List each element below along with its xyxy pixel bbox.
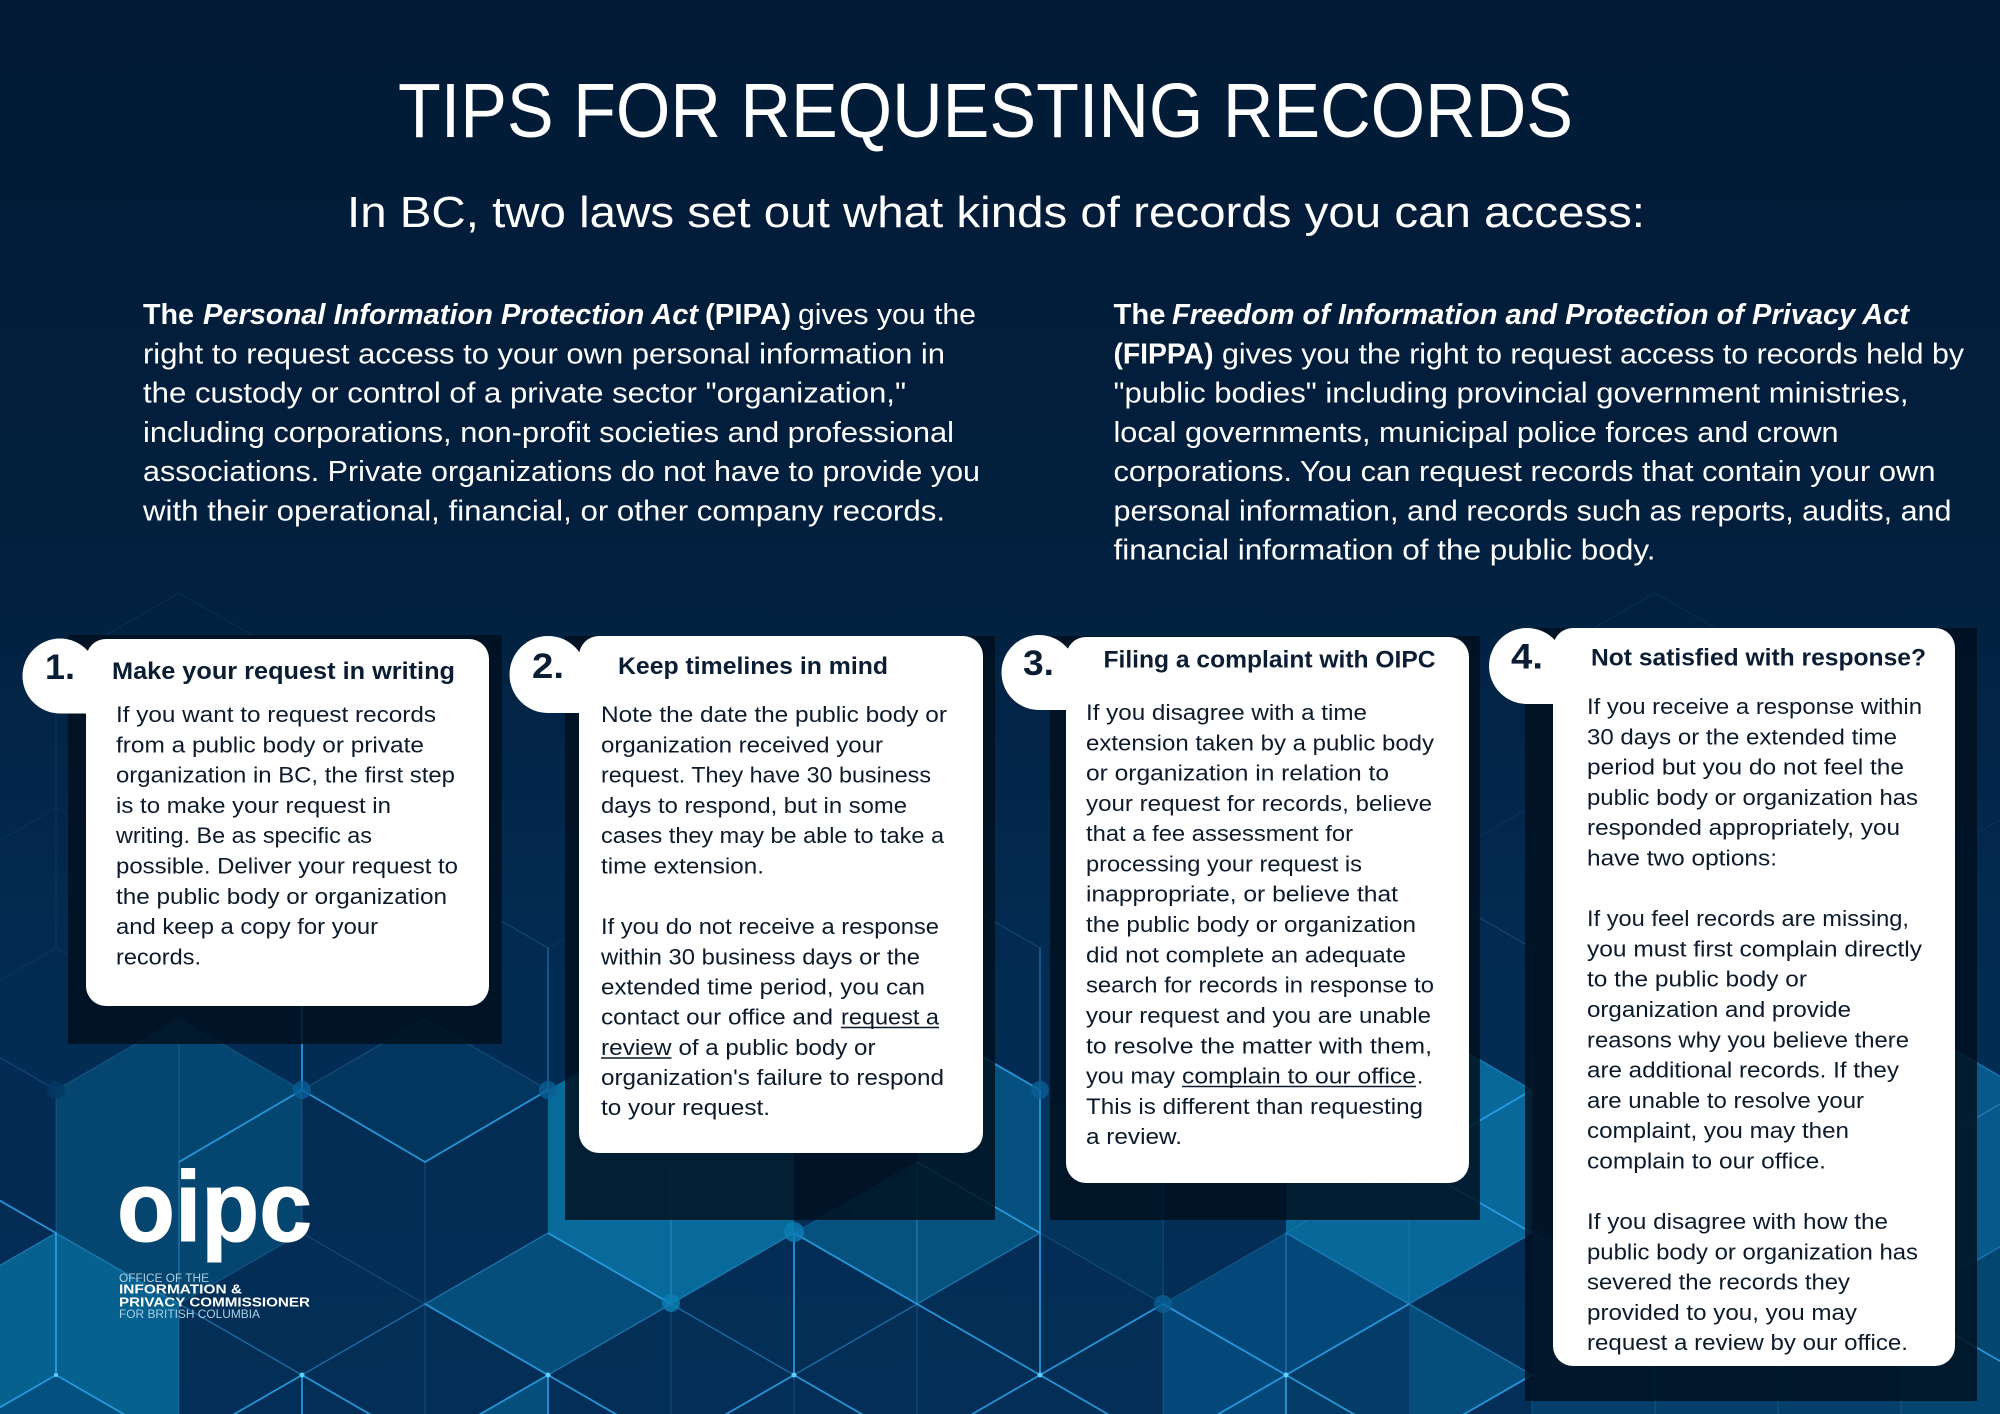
step 1 body text: is to make your request in xyxy=(116,793,391,818)
text block: PIPA: (PIPA) xyxy=(705,299,791,331)
step 2 body text: Note the date the public body or xyxy=(601,702,948,727)
step 4 body text: If you receive a response within xyxy=(1587,694,1922,719)
text block: PIPA: right to request access to your own personal information in xyxy=(143,338,945,370)
step 3 body text: to resolve the matter with them, xyxy=(1086,1033,1432,1058)
step 3 body text: or organization in relation to xyxy=(1086,761,1389,786)
logo: OIPC xyxy=(117,1151,312,1321)
step 4 body text: responded appropriately, you xyxy=(1587,815,1900,840)
step 4 body text: 30 days or the extended time xyxy=(1587,724,1897,749)
text block: PIPA: gives you the xyxy=(798,299,976,331)
step 3 body text: extension taken by a public body xyxy=(1086,730,1435,755)
step 1 number: 1. xyxy=(45,648,75,687)
step 3 body text: that a fee assessment for xyxy=(1086,821,1354,846)
text block: FIPPA xyxy=(1114,299,1965,566)
step 2 body text: days to respond, but in some xyxy=(601,793,907,818)
step 4 body text: are additional records. If they xyxy=(1587,1058,1900,1083)
step 2 body text: extended time period, you can xyxy=(601,974,925,1000)
step 3 body text: the public body or organization xyxy=(1086,912,1416,937)
step 2 body text: contact our office and xyxy=(601,1004,833,1030)
step 1 body text: If you want to request records xyxy=(116,702,436,727)
step 2 body text: If you do not receive a response xyxy=(601,914,939,939)
text block: PIPA: associations. Private organizations do not have to provide you xyxy=(143,456,980,488)
panel: step 3 xyxy=(1002,635,1480,1220)
step 4 body text: have two options: xyxy=(1587,846,1777,870)
panel: step 4 xyxy=(1489,628,1977,1401)
step 4 body text: provided to you, you may xyxy=(1587,1300,1858,1325)
text block: PIPA xyxy=(142,299,980,527)
step 4 body text: to the public body or xyxy=(1587,967,1808,992)
step 2 body text: organization's failure to respond xyxy=(601,1065,944,1090)
text block: FIPPA: (FIPPA) xyxy=(1114,338,1214,370)
step 4 body text: organization and provide xyxy=(1587,997,1851,1022)
step 1 body text: writing. Be as specific as xyxy=(115,823,372,848)
subtitle: In BC, two laws set out what kinds of records you can access: xyxy=(347,188,1645,237)
step 4 body text: reasons why you believe there xyxy=(1587,1027,1909,1052)
text block: PIPA: Personal Information Protection Act xyxy=(203,299,700,331)
text block: PIPA: the custody or control of a private sector "organization," xyxy=(143,378,906,410)
step 3 body text: search for records in response to xyxy=(1086,973,1434,998)
step 3 body text: your request and you are unable xyxy=(1086,1003,1431,1028)
logo: OIPC: OFFICE OF THE xyxy=(119,1273,209,1285)
step 1 body text: records. xyxy=(116,944,201,970)
step 2 body text: review xyxy=(601,1035,672,1060)
step 2 body text: request. They have 30 business xyxy=(601,762,931,788)
logo: OIPC: FOR BRITISH COLUMBIA xyxy=(119,1309,260,1321)
step 2 body text: of a public body or xyxy=(678,1035,876,1060)
step 2 body text: organization received your xyxy=(601,732,884,758)
step 2 number: 2. xyxy=(532,647,564,686)
step 2 body text: within 30 business days or the xyxy=(600,944,920,970)
step 3 body text: processing your request is xyxy=(1086,851,1362,876)
step 3 body text: . xyxy=(1417,1064,1423,1088)
text block: FIPPA: gives you the right to request access to records held by xyxy=(1222,338,1965,370)
step 4 body text: you must first complain directly xyxy=(1587,936,1923,961)
step 3 body text: If you disagree with a time xyxy=(1086,700,1367,725)
text block: PIPA: with their operational, financial, or other company records. xyxy=(142,495,945,527)
step 4 body text: period but you do not feel the xyxy=(1587,755,1904,780)
step 4 body text: complaint, you may then xyxy=(1587,1118,1849,1143)
step 2 body text: time extension. xyxy=(601,854,764,878)
step 2 heading: Keep timelines in mind xyxy=(618,653,888,680)
step 3 body text: This is different than requesting xyxy=(1086,1094,1423,1119)
panel: step 1 xyxy=(22,635,502,1044)
step 3 body text: a review. xyxy=(1086,1124,1182,1149)
panel: step 2 xyxy=(510,636,995,1220)
step 3 heading: Filing a complaint with OIPC xyxy=(1104,646,1436,674)
step 1 heading: Make your request in writing xyxy=(112,658,455,685)
step 3 body text: inappropriate, or believe that xyxy=(1086,882,1399,907)
step 3 number: 3. xyxy=(1023,644,1054,683)
step 2 body text xyxy=(600,702,948,1120)
text block: FIPPA: local governments, municipal police forces and crown xyxy=(1114,417,1838,449)
text block: PIPA: including corporations, non-profit societies and professional xyxy=(143,417,954,449)
step 3 body text xyxy=(1086,700,1435,1149)
text block: FIPPA: The xyxy=(1114,299,1166,331)
step 3 body text: you may xyxy=(1086,1064,1176,1088)
step 4 heading: Not satisfied with response? xyxy=(1591,644,1926,672)
background hexagon pattern xyxy=(0,593,2000,1414)
text block: FIPPA: personal information, and records such as reports, audits, and xyxy=(1114,495,1952,527)
step 4 body text: request a review by our office. xyxy=(1587,1330,1908,1355)
step 1 body text: organization in BC, the first step xyxy=(116,762,455,788)
text block: FIPPA: corporations. You can request records that contain your own xyxy=(1114,456,1936,488)
step 4 body text: If you feel records are missing, xyxy=(1587,906,1909,931)
text block: FIPPA: financial information of the public body. xyxy=(1114,534,1656,566)
step 1 body text: from a public body or private xyxy=(116,732,424,758)
title: TIPS FOR REQUESTING RECORDS xyxy=(398,68,1573,154)
step 4 body text xyxy=(1587,694,1923,1355)
step 2 body text: to your request. xyxy=(601,1095,770,1120)
text block: FIPPA: "public bodies" including provincial government ministries, xyxy=(1114,378,1908,410)
step 4 body text: are unable to resolve your xyxy=(1587,1088,1865,1113)
step 4 number: 4. xyxy=(1511,638,1543,676)
step 3 body text: your request for records, believe xyxy=(1086,791,1432,816)
step 4 body text: If you disagree with how the xyxy=(1587,1209,1888,1234)
text block: FIPPA: Freedom of Information and Protection of Privacy Act xyxy=(1172,299,1911,331)
step 1 body text: the public body or organization xyxy=(116,884,447,909)
step 1 body text xyxy=(115,702,458,970)
step 2 body text: cases they may be able to take a xyxy=(601,823,944,848)
step 4 body text: public body or organization has xyxy=(1587,785,1918,810)
step 2 body text: request a xyxy=(841,1004,940,1030)
step 4 body text: complain to our office. xyxy=(1587,1148,1826,1174)
step 1 body text: and keep a copy for your xyxy=(116,914,379,939)
step 4 body text: public body or organization has xyxy=(1587,1239,1918,1264)
step 3 body text: complain to our office xyxy=(1182,1064,1416,1088)
logo: OIPC: PRIVACY COMMISSIONER xyxy=(119,1296,310,1310)
text block: PIPA: The xyxy=(143,299,194,331)
logo: OIPC: INFORMATION & xyxy=(119,1282,242,1296)
logo: OIPC: oipc xyxy=(117,1151,312,1263)
step 1 body text: possible. Deliver your request to xyxy=(116,854,458,878)
step 4 body text: severed the records they xyxy=(1587,1270,1851,1295)
step 3 body text: did not complete an adequate xyxy=(1086,942,1406,967)
